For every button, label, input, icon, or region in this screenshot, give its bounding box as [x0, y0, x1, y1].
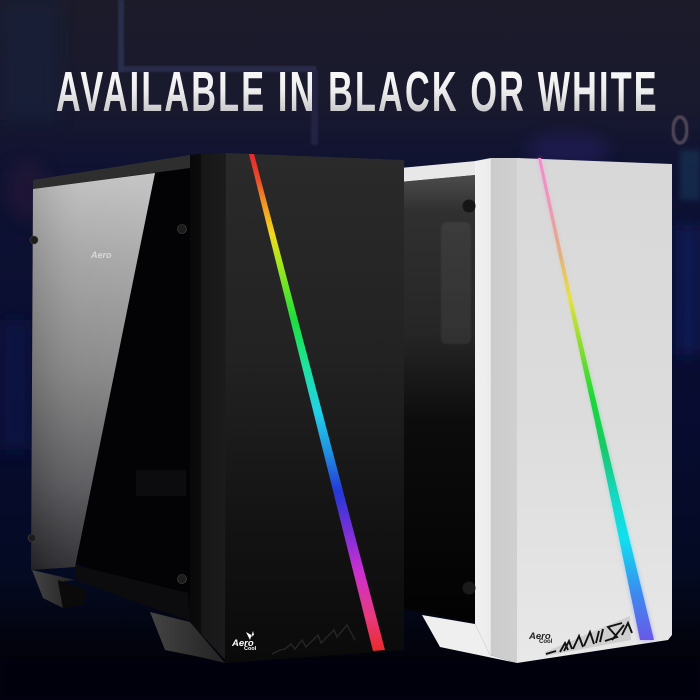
black case: glass logo: Aero: [90, 250, 112, 260]
heading: AVAILABLE IN BLACK OR WHITE: [56, 59, 657, 123]
black case: front panel: [225, 153, 404, 663]
white case: RGB strip glow: [538, 158, 654, 640]
white case: RGB strip: [538, 158, 654, 640]
white case: foot: [422, 615, 517, 663]
black case: top edge: [33, 155, 190, 189]
white case: logo: [528, 631, 553, 645]
white case: top screw: [462, 200, 476, 212]
black case: interior: [31, 168, 190, 605]
white case: top edge: [400, 161, 476, 182]
white case: [400, 158, 672, 663]
black case: engraved pattern: [272, 625, 355, 654]
black case: RGB strip: [249, 154, 385, 651]
black case: logo: Aero: [231, 638, 254, 649]
black case: logo: Cool: [244, 646, 257, 652]
white case: logo: Aero: [528, 631, 551, 642]
black case: glass reflection: [31, 173, 155, 570]
black case: logo: [231, 631, 257, 652]
white case: corner pillar: [475, 158, 520, 663]
black case: screws: [28, 224, 186, 584]
white case: engraved pattern: [545, 616, 632, 656]
black case: left foot: [32, 570, 87, 608]
black case: right foot: [150, 612, 225, 663]
black case: corner pillar: [190, 153, 228, 663]
white case: glass side panel: [400, 175, 475, 623]
white case: front panel: [517, 158, 672, 663]
black case: glass shading: [31, 173, 155, 570]
black case: power supply bay: [136, 470, 186, 496]
white case: logo: Cool: [539, 639, 553, 645]
black case: bottom shroud: [75, 565, 190, 621]
white case: bottom screw: [462, 582, 476, 594]
black case: [28, 153, 404, 663]
white case: interior shape behind glass: [441, 222, 471, 344]
